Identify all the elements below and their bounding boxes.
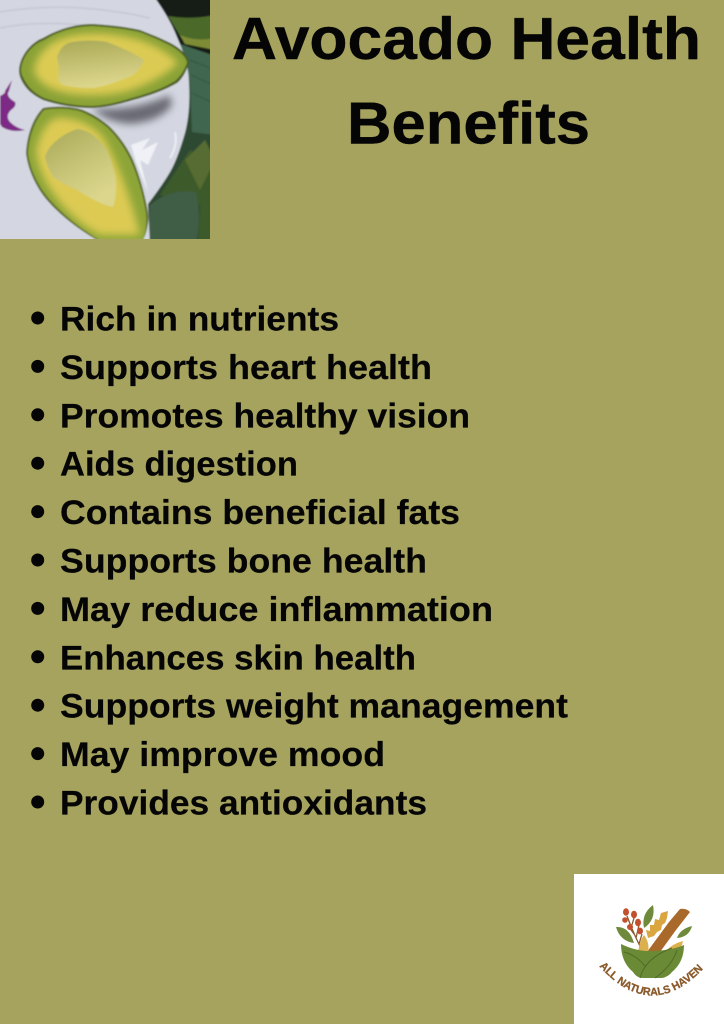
- title: Benefits: [347, 90, 590, 156]
- item: supports bone health: Supports bone health: [60, 542, 427, 580]
- photo: avocado halves on a plate: [0, 0, 220, 250]
- item: aids digestion: Aids digestion: [60, 446, 298, 484]
- item: may improve mood: May improve mood: [60, 736, 385, 774]
- logo panel: [574, 874, 724, 1024]
- avocado half: top: [18, 23, 190, 109]
- icon: berries: [622, 908, 643, 950]
- icon: leaves: [616, 905, 692, 943]
- item: may reduce inflammation: May reduce inflammation: [60, 591, 493, 629]
- benefits list: [31, 300, 569, 822]
- icon: wheat: [646, 911, 668, 938]
- icon: yellow herbs: [638, 935, 683, 952]
- item: enhances skin health: Enhances skin health: [60, 639, 416, 677]
- item: contains beneficial fats: Contains beneficial fats: [60, 494, 460, 532]
- title: [232, 6, 701, 156]
- item: provides antioxidants: Provides antioxidants: [60, 784, 427, 822]
- logo text: ALL NATURALS HAVEN: [599, 963, 703, 996]
- item: supports heart health: Supports heart health: [60, 349, 432, 387]
- title: Avocado Health: [232, 6, 701, 72]
- item: rich in nutrients: Rich in nutrients: [60, 300, 339, 338]
- item: supports weight management: Supports weight management: [60, 688, 569, 726]
- icon: pestle: [647, 909, 690, 952]
- item: promotes healthy vision: Promotes healthy vision: [60, 397, 470, 435]
- avocado half: bottom: [25, 106, 150, 239]
- icon: mortar bowl: [621, 944, 684, 978]
